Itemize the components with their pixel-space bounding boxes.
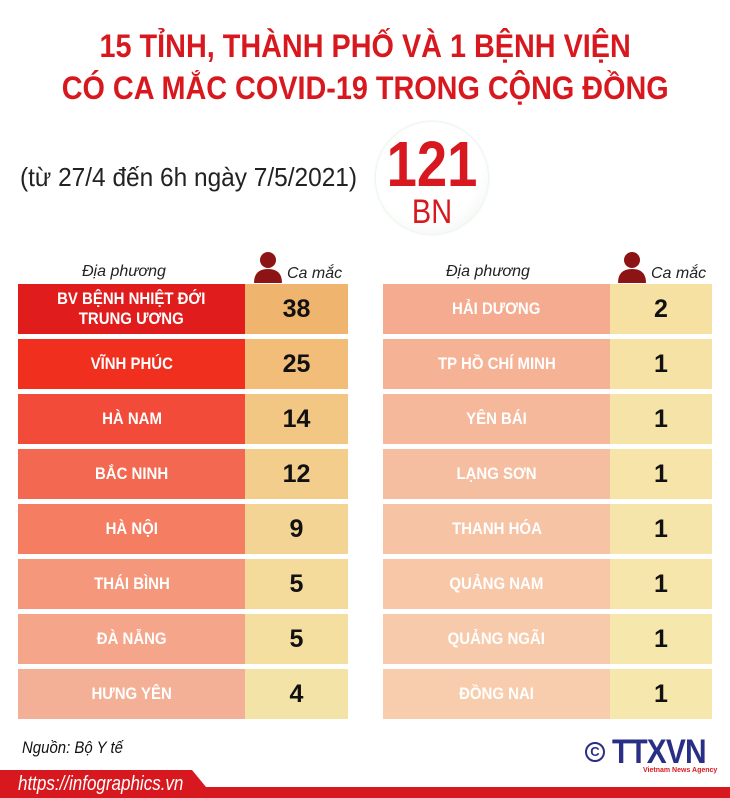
total badge circle: BN	[412, 193, 452, 231]
title	[62, 28, 668, 106]
right table: TP HỒ CHÍ MINH	[438, 354, 555, 373]
left table: HÀ NAM	[102, 409, 161, 428]
left table: 12	[283, 460, 310, 488]
right table: 1	[654, 680, 668, 708]
left table: 25	[283, 350, 310, 378]
left table: 5	[290, 624, 303, 652]
right table: QUẢNG NGÃI	[448, 629, 545, 648]
right table: YÊN BÁI	[466, 409, 527, 428]
icon: person	[618, 252, 646, 283]
total badge circle: 121	[387, 128, 477, 200]
left header: Ca mắc	[287, 265, 342, 282]
icon: person	[254, 252, 282, 283]
logo: TTXVN	[585, 733, 718, 774]
logo: TTXVN: C	[590, 744, 600, 759]
left table: 4	[290, 680, 303, 708]
right table: 1	[654, 404, 668, 432]
left table: 14	[283, 404, 310, 432]
right table: 1	[654, 350, 668, 378]
right header: Địa phương	[446, 263, 530, 280]
left header: Địa phương	[82, 263, 166, 280]
logo: TTXVN: Vietnam News Agency	[643, 767, 717, 774]
footer band with url: https://infographics.vn	[18, 773, 183, 795]
logo: TTXVN: TTXVN	[612, 733, 706, 771]
right table: 1	[654, 624, 668, 652]
left table: TRUNG ƯƠNG	[79, 309, 184, 328]
right table	[383, 284, 712, 719]
right table: THANH HÓA	[452, 519, 541, 538]
left table: HÀ NỘI	[105, 519, 158, 538]
left table: 5	[290, 570, 303, 598]
left header	[82, 252, 342, 283]
right table: 1	[654, 570, 668, 598]
left table: 9	[290, 514, 303, 542]
title: CÓ CA MẮC COVID-19 TRONG CỘNG ĐỒNG	[62, 70, 668, 106]
subtitle: date range: (từ 27/4 đến 6h ngày 7/5/2021)	[20, 162, 357, 192]
right table: 1	[654, 514, 668, 542]
total badge circle	[376, 122, 488, 234]
right table: LẠNG SƠN	[456, 464, 537, 483]
left table: ĐÀ NẴNG	[97, 629, 166, 648]
left table: 38	[283, 294, 310, 322]
right table: HẢI DƯƠNG	[452, 299, 541, 318]
left table	[18, 284, 348, 719]
source: Nguồn: Bộ Y tế	[22, 738, 123, 757]
right table: 2	[654, 294, 668, 322]
right table: ĐỒNG NAI	[459, 684, 534, 703]
left table: BV BỆNH NHIỆT ĐỚI	[57, 289, 206, 308]
right header: Ca mắc	[651, 265, 706, 282]
title: 15 TỈNH, THÀNH PHỐ VÀ 1 BỆNH VIỆN	[99, 28, 631, 64]
footer band with url	[0, 770, 730, 798]
right table: QUẢNG NAM	[450, 574, 543, 593]
left table: HƯNG YÊN	[91, 684, 172, 703]
right table: 1	[654, 460, 668, 488]
right header	[446, 252, 706, 283]
left table: BẮC NINH	[95, 464, 168, 483]
left table: THÁI BÌNH	[94, 574, 169, 593]
left table: VĨNH PHÚC	[90, 354, 173, 373]
